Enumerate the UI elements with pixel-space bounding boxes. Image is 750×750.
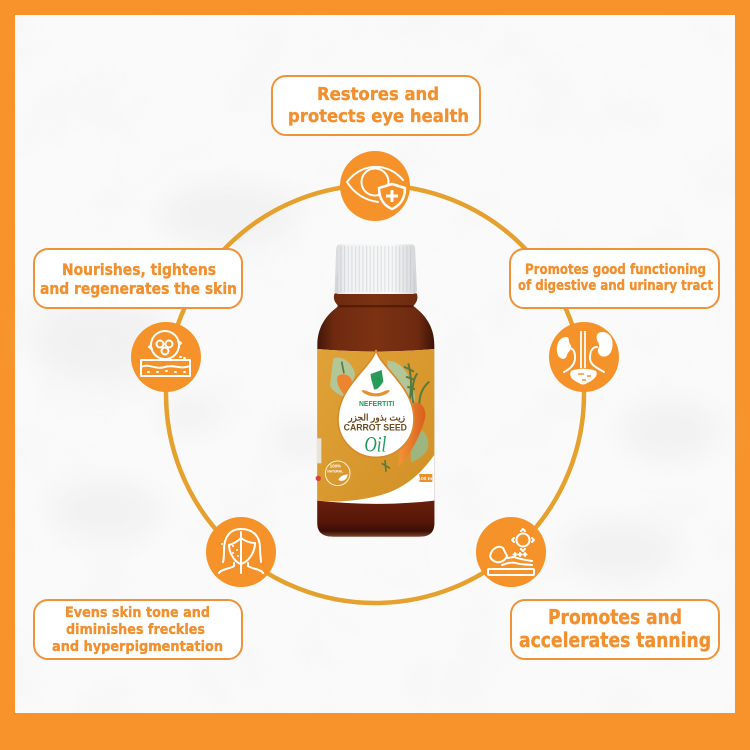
bottle glass: [317, 293, 434, 537]
label: CARROT SEED: [344, 423, 407, 433]
label: 100 ml: [418, 476, 434, 482]
logo: [371, 370, 383, 389]
icon: face with pigmentation: [206, 517, 276, 587]
callout: eye health: Restores and: [317, 84, 439, 105]
icon: skin layers and cells: [131, 322, 201, 392]
callout: skin tone: [34, 600, 242, 659]
droplet: [338, 350, 414, 457]
callout: digestive and urinary tract: Promotes good functioning: [525, 262, 706, 278]
bottle cap: [335, 244, 417, 294]
neck highlight: [337, 305, 413, 307]
natural badge: 100%: [330, 463, 341, 468]
callout: skin tone: Evens skin tone and: [65, 605, 210, 621]
callout: eye health: [272, 76, 480, 135]
bottle base: [317, 500, 434, 537]
callout: digestive and urinary tract: [510, 249, 719, 308]
callout: eye health: protects eye health: [288, 106, 469, 127]
callout: skin regeneration: and regenerates the skin: [40, 279, 237, 298]
natural badge: [325, 461, 350, 486]
natural badge: NATURAL: [327, 469, 343, 473]
label: NEFERTITI: [359, 401, 394, 408]
icon: sunbathing figure: [476, 517, 546, 587]
size tag: [419, 474, 432, 482]
callout: digestive and urinary tract: of digestive and urinary tract: [518, 278, 713, 294]
callout: skin tone: and hyperpigmentation: [52, 639, 223, 655]
barcode strip: [317, 438, 321, 463]
icon: kidneys and urinary tract: [549, 322, 619, 392]
callout: skin tone: diminishes freckles: [66, 622, 205, 638]
callout: tanning: [511, 600, 719, 659]
background leaves and carrots: [387, 361, 415, 452]
callout: tanning: accelerates tanning: [519, 628, 711, 652]
icon: eye with shield: [340, 151, 410, 221]
product bottle: [316, 244, 434, 537]
circular ring: [166, 185, 584, 603]
label: Oil: [364, 431, 386, 456]
callout: skin regeneration: Nourishes, tightens: [62, 260, 216, 279]
label: زيت بذور الجزر: [347, 413, 405, 424]
callout: tanning: Promotes and: [548, 605, 682, 629]
callout: skin regeneration: [34, 249, 242, 308]
label: [316, 349, 434, 504]
